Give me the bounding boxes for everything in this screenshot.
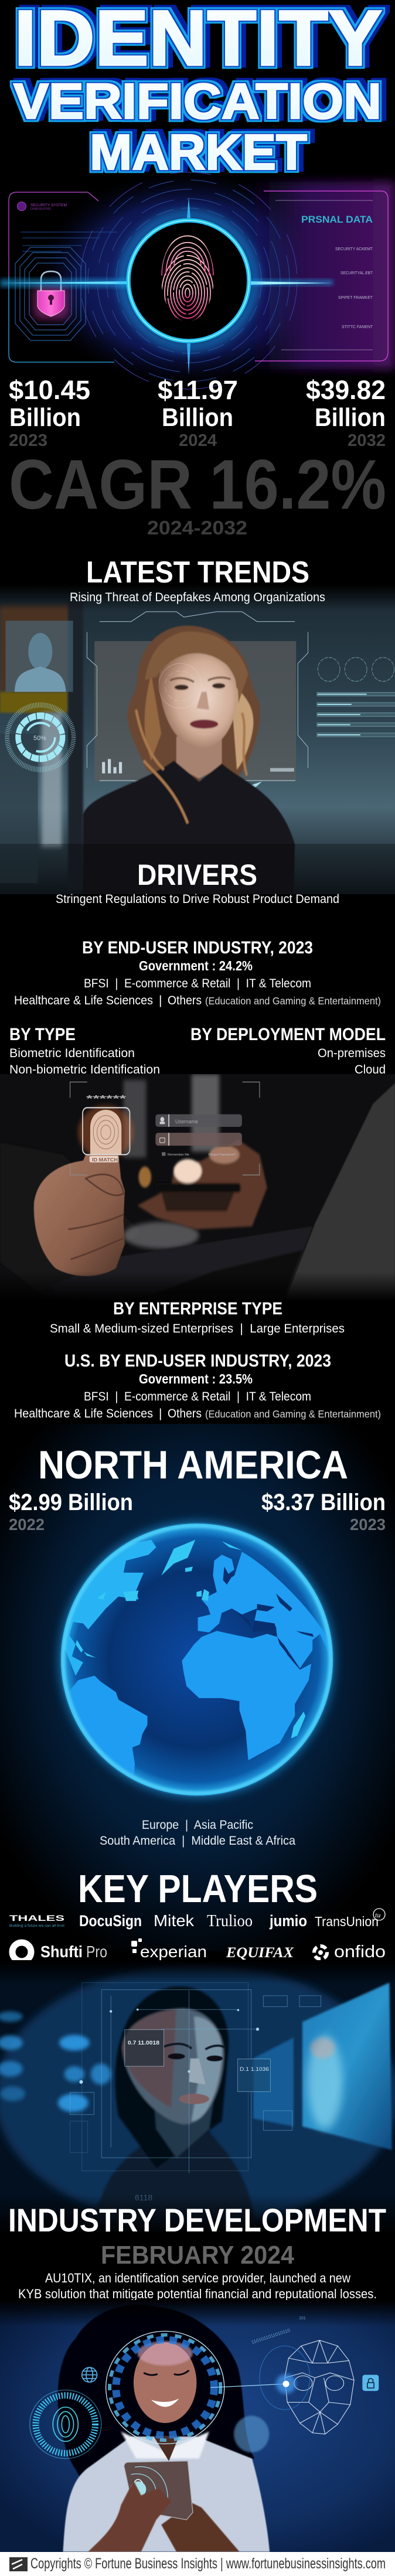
laptop	[50, 1083, 395, 1313]
panel: face scan photo	[0, 1960, 395, 2236]
panel: biometric woman photo	[0, 2300, 395, 2552]
segment: by deployment model: On-premises	[318, 1047, 386, 1060]
ring	[123, 215, 254, 346]
right stats	[318, 657, 394, 682]
stat: 2024: Billion	[162, 403, 233, 432]
title: VERIFICATION	[13, 74, 382, 130]
segment: by type: Biometric Identification	[9, 1047, 135, 1060]
logo: Experian	[131, 1938, 207, 1965]
segment: by end-user industry: (Education and Gaming & Entertainment)	[205, 995, 381, 1007]
frame lines	[9, 191, 388, 362]
stat: 2032: 2032	[348, 431, 386, 450]
panel: biometric woman photo: 101	[299, 2316, 306, 2321]
logo: TransUnion: TransUnion	[315, 1914, 379, 1929]
title: MARKET	[90, 125, 307, 180]
stat: 2024: $11.97	[158, 375, 238, 405]
holographic UI	[70, 1982, 321, 2173]
stat: 2022: $2.99 Billion	[9, 1490, 133, 1515]
label: personal data	[301, 214, 373, 329]
segment: by end-user industry: BFSI | E-commerce & Retail | IT & Telecom	[84, 977, 311, 990]
scanned fingertip	[78, 1105, 134, 1163]
stat: 2023: $10.45	[9, 375, 90, 405]
heading: key players: KEY PLAYERS	[78, 1867, 318, 1911]
logo: Thales	[9, 1914, 64, 1928]
segment: by end-user industry: Others	[168, 994, 202, 1007]
icon: padlock	[34, 271, 68, 319]
login fields	[155, 1115, 242, 1156]
segment: by enterprise type: BY ENTERPRISE TYPE	[113, 1299, 282, 1318]
label: security system: DIMENSIONS	[30, 207, 52, 211]
photo UI labels: Forgot Password?	[209, 1153, 236, 1157]
text: development	[18, 2271, 377, 2301]
segment: by type: Non-biometric Identification	[9, 1063, 160, 1076]
label: personal data: PRSNAL DATA	[301, 214, 373, 225]
logo: Thales: THALES	[9, 1914, 64, 1923]
blurred lights	[0, 2011, 111, 2112]
label: personal data: SECURITYAL.EBT	[340, 271, 373, 275]
logo: Mitek: Mitek	[154, 1911, 195, 1930]
logo: Shufti Pro: Shufti	[40, 1943, 83, 1961]
stat: 2023: 2023	[9, 431, 47, 450]
logo: Onfido: onfido	[334, 1943, 386, 1961]
segment: U.S. by end-user industry: Others	[168, 1407, 202, 1420]
panel: face scan photo: 6118	[135, 2193, 152, 2202]
label: personal data: SECURITY ACKEMT	[335, 247, 373, 251]
photo UI labels: Remember Me	[168, 1153, 189, 1157]
tablet	[124, 2461, 193, 2520]
icon: fingerprint	[162, 236, 213, 330]
segment: by deployment model	[190, 1025, 386, 1076]
segment: by enterprise type: Small & Medium-sized Enterprises | Large Enterprises	[50, 1322, 345, 1335]
logo: Trulioo: Trulioo	[207, 1912, 253, 1930]
text: driver: Stringent Regulations to Drive Robust Product Demand	[56, 892, 339, 906]
panel: fingerprint login photo	[0, 1074, 395, 1313]
label: personal data: STITTC FANENT	[342, 325, 373, 329]
segment: by enterprise type	[50, 1299, 345, 1335]
stat: 2023	[9, 375, 90, 450]
woman face	[76, 1986, 257, 2231]
logo: DocuSign: DocuSign	[79, 1912, 142, 1930]
title	[13, 0, 382, 180]
panel: latest trends photo	[0, 584, 395, 895]
CAGR: 2024-2032	[147, 517, 247, 539]
text: other regions	[100, 1818, 295, 1848]
segment: U.S. by end-user industry: |	[159, 1407, 162, 1420]
panel: key player logos	[9, 1909, 386, 1965]
segment: U.S. by end-user industry: Government : 23.5%	[139, 1371, 253, 1386]
woman with hair	[83, 626, 295, 895]
logo: Shufti Pro	[12, 1943, 107, 1961]
silhouette box	[5, 621, 73, 692]
gauge label: 50%	[33, 735, 46, 742]
segment: by end-user industry	[14, 938, 381, 1007]
photo UI labels: ID MATCH	[92, 1157, 118, 1163]
stat: 2024	[158, 375, 238, 450]
photo UI labels	[86, 1094, 236, 1163]
photo UI labels: Username	[175, 1119, 198, 1125]
stat: 2023 regional: 2023	[350, 1515, 386, 1534]
hand behind tablet	[161, 2503, 239, 2551]
panel: globe background	[0, 1424, 395, 1951]
segment: by deployment model: Cloud	[355, 1063, 386, 1076]
label: personal data: SPIPET FRAMKET	[338, 296, 373, 300]
footer	[0, 2552, 395, 2576]
label: security system	[18, 202, 67, 211]
icon: lock tile	[362, 2375, 379, 2391]
segment: U.S. by end-user industry: U.S. BY END-USER INDUSTRY, 2023	[64, 1351, 331, 1371]
fist	[34, 1154, 125, 1276]
text: trend: Rising Threat of Deepfakes Among Organizations	[70, 591, 325, 604]
label: security system: SECURITY SYSTEM	[30, 203, 67, 207]
stat: 2023 regional	[261, 1490, 386, 1534]
stat: 2023 regional: $3.37 Billion	[261, 1490, 386, 1515]
segment: by end-user industry: Healthcare & Life Sciences	[14, 994, 153, 1007]
stat: 2022: 2022	[9, 1515, 45, 1534]
globe	[50, 1521, 335, 1798]
segment: by type: BY TYPE	[9, 1025, 76, 1044]
heading: north america: NORTH AMERICA	[38, 1443, 348, 1487]
front hand	[88, 2480, 171, 2551]
face mesh	[285, 2340, 354, 2434]
date: FEBRUARY 2024	[101, 2241, 294, 2270]
panel: face scan photo: 0.7 11.0018	[128, 2040, 159, 2046]
heading: drivers: DRIVERS	[137, 858, 257, 891]
woman	[58, 2305, 270, 2551]
stat: 2032: $39.82	[306, 375, 386, 405]
stat: 2032	[306, 375, 386, 450]
stat: 2023: Billion	[9, 403, 81, 432]
octagon rings	[15, 247, 86, 340]
second hand and phone	[137, 1140, 267, 1229]
icon: globe	[82, 2367, 97, 2382]
segment: by end-user industry: Government : 24.2%	[139, 958, 253, 973]
light beams	[0, 197, 333, 375]
HUD ring around face	[106, 2331, 224, 2444]
viewfinder brackets	[70, 1082, 260, 1175]
logo: Equifax: EQUIFAX	[226, 1945, 294, 1961]
heading: latest trends: LATEST TRENDS	[86, 556, 309, 590]
panel: face scan photo: D.1 1.1036	[240, 2066, 269, 2072]
logo: Fortune Business Insights	[9, 2557, 28, 2571]
segment: U.S. by end-user industry: (Education and Gaming & Entertainment)	[205, 1408, 381, 1420]
photo UI labels: ******	[86, 1094, 127, 1104]
icon: fingerprint dial	[30, 2390, 101, 2459]
panel: fingerprint security banner	[0, 170, 395, 389]
logo: Thales: Building a future we can all trust	[9, 1924, 64, 1928]
segment: by end-user industry: BY END-USER INDUSTRY, 2023	[82, 938, 313, 958]
stat: 2024: 2024	[179, 431, 217, 450]
continents	[50, 1540, 335, 1782]
scan spark and line	[210, 2346, 310, 2410]
text: other regions: Europe | Asia Pacific	[142, 1818, 253, 1832]
segment: U.S. by end-user industry: Healthcare & Life Sciences	[14, 1407, 153, 1420]
logo: TransUnion: tu	[375, 1911, 380, 1919]
logo: Experian: experian	[140, 1943, 207, 1961]
center panel	[94, 641, 296, 782]
logo: Onfido	[314, 1943, 386, 1961]
side screens	[253, 1982, 392, 2150]
gauge	[7, 705, 74, 769]
stat: 2032: Billion	[315, 403, 386, 432]
segment: U.S. by end-user industry	[14, 1351, 381, 1420]
text: development: AU10TIX, an identification service provider, launched a new	[45, 2271, 350, 2285]
stat: 2022	[9, 1490, 133, 1534]
segment: by type	[9, 1025, 160, 1076]
panel: biometric woman photo: 1101011011010110	[251, 2328, 291, 2345]
segment: by end-user industry: |	[159, 994, 162, 1007]
logo: Jumio: jumio	[269, 1912, 307, 1930]
seas	[223, 1567, 314, 1668]
segment: U.S. by end-user industry: BFSI | E-commerce & Retail | IT & Telecom	[84, 1390, 311, 1403]
logo: Shufti Pro: Pro	[86, 1943, 107, 1961]
small data globe	[234, 2415, 269, 2452]
text: other regions: South America | Middle East & Africa	[100, 1834, 295, 1848]
